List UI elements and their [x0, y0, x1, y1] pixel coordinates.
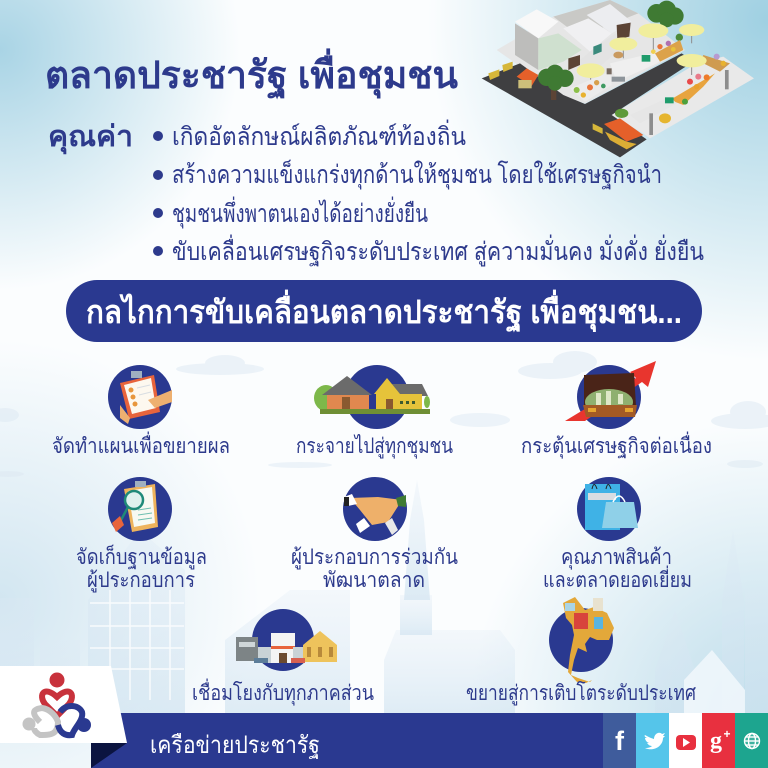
back plot [497, 0, 685, 103]
item: database [76, 477, 207, 593]
buildings [553, 0, 638, 37]
item: database: ผู้ประกอบการ [87, 569, 195, 593]
social buttons: + [723, 727, 731, 741]
social buttons: f [615, 726, 625, 756]
footer bar [91, 713, 768, 768]
left tree [551, 87, 556, 100]
item: houses: กระจายไปสู่ทุกชุมชน [296, 434, 453, 459]
social buttons [603, 713, 768, 768]
produce [574, 41, 726, 105]
front sidewalk [612, 57, 754, 138]
road [482, 53, 693, 157]
stalls upper row [570, 72, 612, 102]
umbrellas [638, 23, 668, 38]
item: economic stimulus: กระตุ้นเศรษฐกิจต่อเนื่อง [521, 431, 712, 459]
item: houses [296, 365, 453, 459]
background window grid [90, 590, 184, 700]
right tree [647, 1, 684, 27]
item: national growth, Thailand map [466, 597, 697, 706]
item: all sectors: เชื่อมโยงกับทุกภาคส่วน [192, 678, 374, 706]
background house [684, 650, 745, 713]
item: shopping bags: คุณภาพสินค้า [561, 546, 672, 570]
background city skyline [0, 480, 768, 720]
background clouds [0, 351, 768, 477]
item: joined hands: พัฒนาตลาด [323, 569, 425, 592]
logo panel [0, 666, 127, 743]
values list: ชุมชนพึ่งพาตนเองได้อย่างยั่งยืน [172, 196, 428, 229]
footer bar: เครือข่ายประชารัฐ [150, 732, 320, 759]
values list: สร้างความแข็งแกร่งทุกด้านให้ชุมชน โดยใช้เศรษฐกิจนำ [172, 159, 662, 190]
item: plan: จัดทำแผนเพื่อขยายผล [52, 431, 230, 458]
item: shopping bags [543, 477, 692, 592]
item: joined hands: ผู้ประกอบการร่วมกัน [291, 546, 458, 570]
item: database: จัดเก็บฐานข้อมูล [76, 543, 207, 570]
road barriers [488, 69, 499, 80]
orange awnings [517, 68, 538, 86]
banner [66, 280, 702, 342]
values list [153, 119, 704, 267]
stalls lower row [670, 73, 715, 105]
title: ตลาดประชารัฐ เพื่อชุมชน [45, 48, 458, 100]
umbrella poles [591, 30, 692, 87]
heading: values: คุณค่า [48, 121, 133, 154]
item: national growth, Thailand map: ขยายสู่การเติบโตระดับประเทศ [466, 681, 697, 706]
item: plan [52, 365, 230, 458]
item: economic stimulus [521, 361, 712, 459]
item: joined hands [291, 477, 458, 592]
item: all sectors [192, 609, 374, 706]
item: shopping bags: และตลาดยอดเยี่ยม [543, 565, 692, 592]
values list: เกิดอัตลักษณ์ผลิตภัณฑ์ท้องถิ่น [172, 119, 466, 151]
illustration: isometric market street [482, 0, 754, 157]
social buttons: g [710, 728, 722, 754]
lamp posts [649, 113, 653, 135]
banner: กลไกการขับเคลื่อนตลาดประชารัฐ เพื่อชุมชน... [86, 289, 682, 333]
